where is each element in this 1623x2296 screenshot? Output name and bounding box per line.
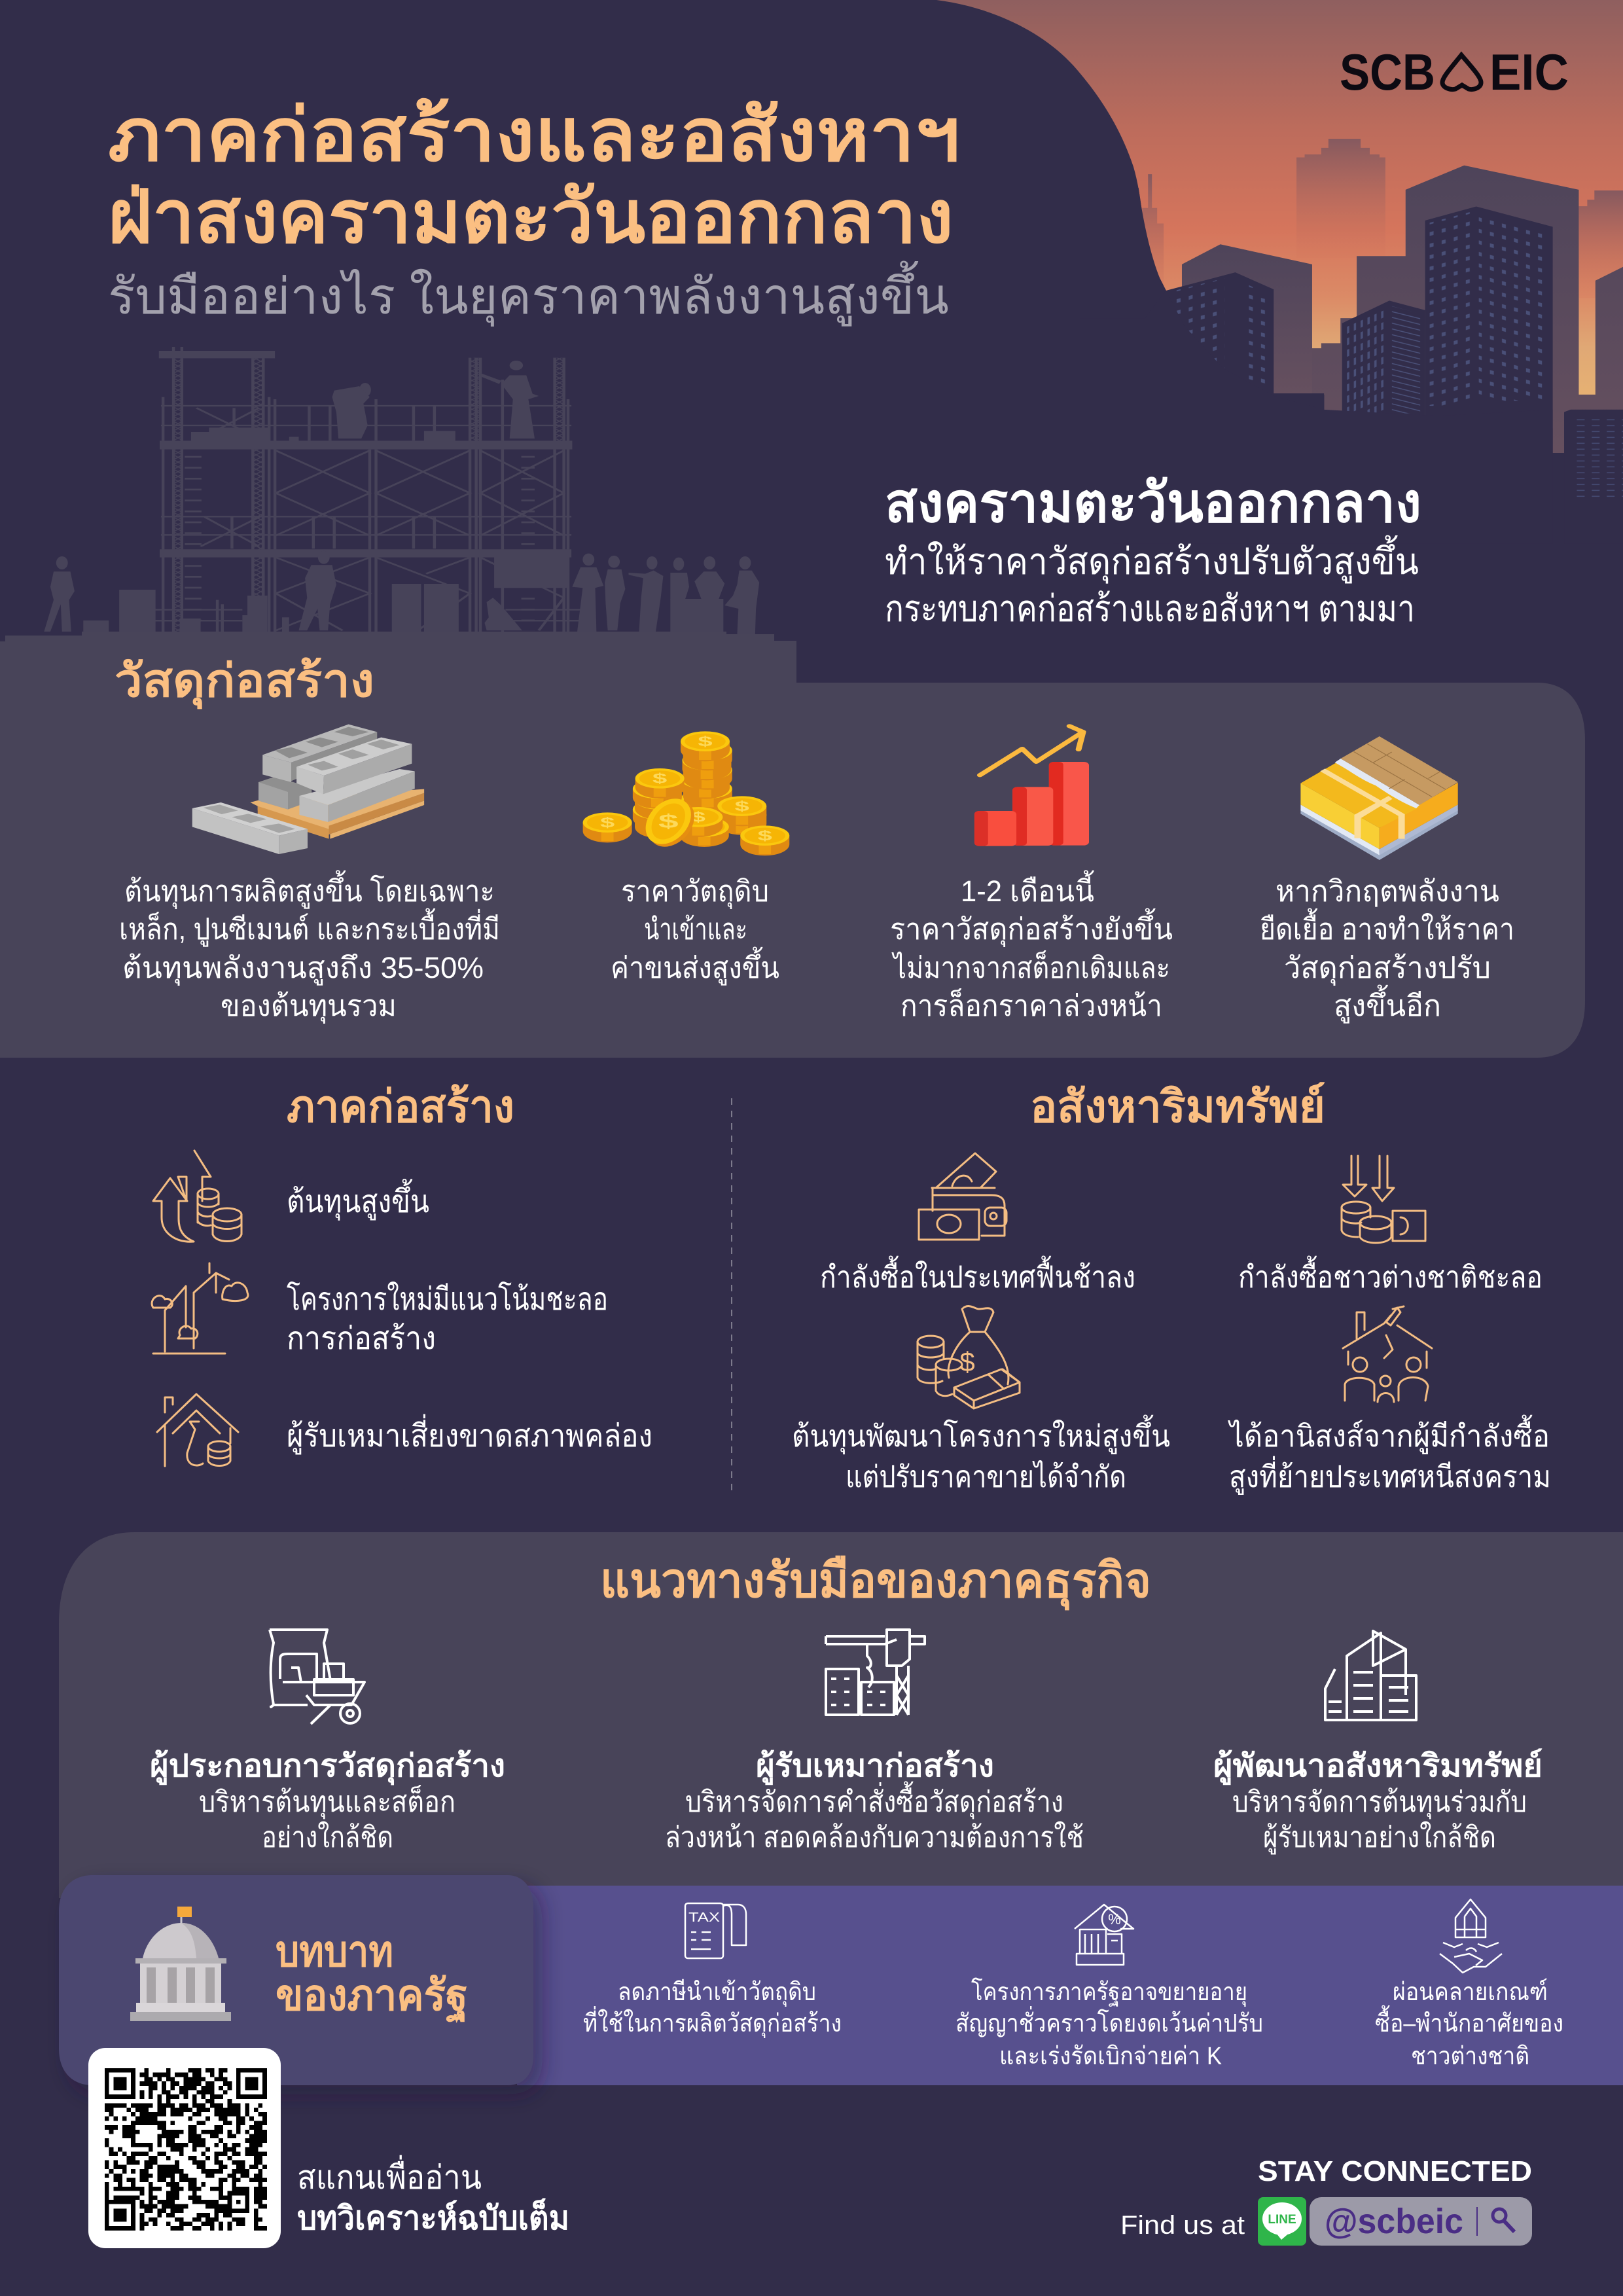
heading: business response: แนวทางรับมือของภาคธุรกิจ	[600, 1553, 1151, 1611]
icon: public building percent: %	[1108, 1911, 1121, 1928]
lattice columns	[173, 358, 565, 632]
text: material suppliers: บริหารต้นทุนและสต็อก	[199, 1785, 455, 1820]
panel: business response	[59, 1532, 1623, 1898]
text: contractor liquidity risk: ผู้รับเหมาเสี่ยงขาดสภาพคล่อง	[287, 1414, 652, 1455]
icon: gold coins	[583, 731, 789, 855]
callout: middle east war: สงครามตะวันออกกลาง	[885, 472, 1421, 533]
title	[108, 94, 960, 258]
left building	[1182, 244, 1312, 396]
text: foreign ownership measure	[1375, 1978, 1563, 2070]
mid buildings	[1274, 166, 1623, 453]
materials text: column 1: ต้นทุนการผลิตสูงขึ้น โดยเฉพาะ	[124, 870, 495, 909]
materials text: column 1: เหล็ก, ปูนซีเมนต์ และกระเบื้องที่มี	[119, 908, 500, 947]
text: public project measure: โครงการภาครัฐอาจขยายอายุ	[971, 1977, 1247, 2007]
text: developers: ผู้รับเหมาอย่างใกล้ชิด	[1263, 1821, 1496, 1855]
icon: foreign buyers falling	[1342, 1156, 1425, 1243]
text: tax measure	[583, 1979, 842, 2038]
materials text: column 2: นำเข้าและ	[644, 912, 747, 946]
text: find us at: Find us at	[1120, 2211, 1245, 2240]
text: new project cost: ต้นทุนพัฒนาโครงการใหม่สูงขึ้น	[792, 1414, 1170, 1455]
text: public project measure	[955, 1977, 1263, 2070]
dark foreground mass	[1113, 218, 1553, 544]
icon: LINE	[1258, 2197, 1306, 2246]
government card	[59, 1875, 533, 2085]
lower right building	[1564, 410, 1623, 544]
icon: tax form: TAX	[688, 1910, 720, 1925]
icon: LINE: LINE	[1268, 2213, 1296, 2227]
heading: government role: บทบาท	[276, 1927, 393, 1975]
text: scan to read	[297, 2155, 569, 2236]
text: slowing new projects: การก่อสร้าง	[287, 1321, 436, 1356]
text: war refugees demand	[1227, 1414, 1551, 1495]
materials text: column 4: วัสดุก่อสร้างปรับ	[1284, 951, 1491, 986]
QR code	[88, 2048, 281, 2248]
text: tax measure: ที่ใช้ในการผลิตวัสดุก่อสร้าง	[583, 2006, 842, 2038]
text: public project measure: สัญญาชั่วคราวโดยงดเว้นค่าปรับ	[955, 2006, 1263, 2037]
icon: concrete blocks on pallet	[192, 725, 424, 854]
city skyline	[1080, 139, 1623, 544]
title: ภาคก่อสร้างและอสังหาฯ	[108, 94, 960, 176]
materials text: column 4	[1260, 874, 1514, 1024]
text: tax measure: ลดภาษีนำเข้าวัตถุดิบ	[618, 1979, 816, 2007]
text: war refugees demand: สูงที่ย้ายประเทศหนีสงคราม	[1229, 1456, 1551, 1495]
materials text: column 2	[611, 874, 779, 986]
dark building with windows: left	[1145, 268, 1324, 429]
government band	[517, 1886, 1623, 2085]
text: public project measure: และเร่งรัดเบิกจ่ายค่า K	[999, 2043, 1222, 2070]
text: foreign ownership measure: ซื้อ–พำนักอาศัยของ	[1375, 2005, 1563, 2037]
heading: materials: วัสดุก่อสร้าง	[115, 655, 374, 709]
materials text: column 2: ราคาวัตถุดิบ	[621, 874, 769, 909]
logo: SCB EIC: SCB	[1340, 43, 1435, 101]
icon: rising bar chart	[974, 726, 1089, 846]
handle pill: @scbeic	[1325, 2202, 1463, 2241]
text: material suppliers: อย่างใกล้ชิด	[262, 1821, 393, 1854]
text: contractors: ผู้รับเหมาก่อสร้าง	[756, 1749, 994, 1785]
text: war refugees demand: ได้อานิสงส์จากผู้มีกำลังซื้อ	[1227, 1414, 1550, 1454]
icon: contractor liquidity risk	[157, 1394, 238, 1466]
materials text: column 1: ของต้นทุนรวม	[221, 989, 397, 1024]
text: new project cost	[792, 1414, 1170, 1494]
handle pill	[1310, 2197, 1532, 2246]
text: foreign ownership measure: ชาวต่างชาติ	[1411, 2043, 1529, 2070]
icon: money bag and bricks	[918, 1306, 1020, 1408]
construction site silhouette	[44, 347, 759, 635]
text: slowing new projects: โครงการใหม่มีแนวโน้มชะลอ	[287, 1281, 608, 1317]
icon: wallet and cash	[919, 1153, 1007, 1240]
text: contractors: ล่วงหน้า สอดคล้องกับความต้องการใช้	[665, 1821, 1084, 1854]
icon: developer towers	[1325, 1631, 1416, 1720]
text: scan to read: สแกนเพื่ออ่าน	[297, 2155, 482, 2196]
text: material suppliers	[150, 1749, 505, 1854]
icon: family leaving war zone	[1343, 1306, 1432, 1402]
workers	[44, 361, 759, 635]
text: slowing new projects	[287, 1281, 608, 1356]
callout: middle east war: ทำให้ราคาวัสดุก่อสร้างปรับตัวสูงขึ้น	[885, 535, 1419, 584]
icon: sack and wheelbarrow	[270, 1630, 365, 1724]
materials text: column 2: ค่าขนส่งสูงขึ้น	[611, 946, 779, 986]
text: developers: บริหารจัดการต้นทุนร่วมกับ	[1232, 1786, 1527, 1820]
callout: middle east war	[885, 472, 1421, 629]
ground and materials panel	[0, 632, 1585, 1058]
icon: handshake and house	[1440, 1899, 1502, 1973]
icon: rising costs	[153, 1151, 241, 1242]
text: developers: ผู้พัฒนาอสังหาริมทรัพย์	[1213, 1748, 1543, 1785]
callout: middle east war: กระทบภาคก่อสร้างและอสังหาฯ ตามมา	[885, 588, 1415, 629]
text: foreign ownership measure: ผ่อนคลายเกณฑ์	[1393, 1978, 1548, 2006]
icon: money bag and bricks: $	[959, 1346, 975, 1377]
icon: gold coins: $	[658, 811, 679, 833]
text: rising costs: ต้นทุนสูงขึ้น	[287, 1179, 429, 1221]
materials text: column 4: สูงขึ้นอีก	[1334, 984, 1441, 1024]
icon: slowing new projects	[152, 1263, 248, 1354]
tall distant tower	[1296, 139, 1385, 258]
text: contractors	[665, 1749, 1084, 1854]
spire silhouette	[1142, 174, 1164, 293]
text: foreign purchasing power: กำลังซื้อชาวต่างชาติชะลอ	[1238, 1255, 1543, 1294]
materials text: column 1: ต้นทุนพลังงานสูงถึง 35-50%	[122, 951, 484, 986]
subtitle: รับมืออย่างไร ในยุคราคาพลังงานสูงขึ้น	[108, 260, 949, 327]
materials text: column 3: 1-2 เดือนนี้	[961, 870, 1094, 908]
sunset sky shape	[936, 0, 1623, 395]
materials text: column 3: ราคาวัสดุก่อสร้างยังขึ้น	[890, 908, 1173, 947]
text: domestic purchasing power: กำลังซื้อในประเทศฟื้นช้าลง	[820, 1255, 1135, 1294]
materials text: column 4: หากวิกฤตพลังงาน	[1275, 874, 1499, 908]
far right tower	[1578, 190, 1623, 298]
heading: government role: ของภาครัฐ	[276, 1971, 468, 2023]
icon: public building percent	[1075, 1905, 1133, 1965]
materials text: column 3	[890, 870, 1173, 1022]
text: material suppliers: ผู้ประกอบการวัสดุก่อสร้าง	[150, 1749, 505, 1785]
icon: crane and buildings	[826, 1630, 925, 1715]
dark building: middle	[1342, 300, 1425, 429]
icon: government dome	[130, 1907, 231, 2021]
scaffold decks and materials	[83, 351, 723, 633]
icon: tax form	[685, 1903, 746, 1958]
scaffold frame	[138, 347, 580, 632]
heading: government role	[276, 1927, 468, 2023]
text: developers	[1213, 1748, 1543, 1855]
materials text: column 3: ไม่มากจากสต็อกเดิมและ	[891, 950, 1170, 984]
title: ฝ่าสงครามตะวันออกกลาง	[108, 176, 954, 258]
text: contractors: บริหารจัดการคำสั่งซื้อวัสดุก่อสร้าง	[685, 1781, 1063, 1820]
logo: SCB EIC: EIC	[1489, 43, 1569, 101]
materials text: column 3: การล็อกราคาล่วงหน้า	[901, 988, 1162, 1022]
text: stay connected: STAY CONNECTED	[1258, 2155, 1532, 2187]
curve cover	[1080, 188, 1166, 318]
logo: SCB EIC	[1340, 43, 1569, 101]
dark building: right tall	[1425, 206, 1553, 454]
text: new project cost: แต่ปรับราคาขายได้จำกัด	[846, 1460, 1126, 1494]
icon: insulated roof layers	[1300, 736, 1458, 860]
materials text: column 4: ยืดเยื้อ อาจทำให้ราคา	[1260, 908, 1514, 946]
text: scan to read: บทวิเคราะห์ฉบับเต็ม	[297, 2198, 569, 2236]
materials text: column 1	[119, 870, 500, 1024]
heading: real estate: อสังหาริมทรัพย์	[1030, 1082, 1325, 1132]
heading: construction sector: ภาคก่อสร้าง	[287, 1082, 514, 1132]
